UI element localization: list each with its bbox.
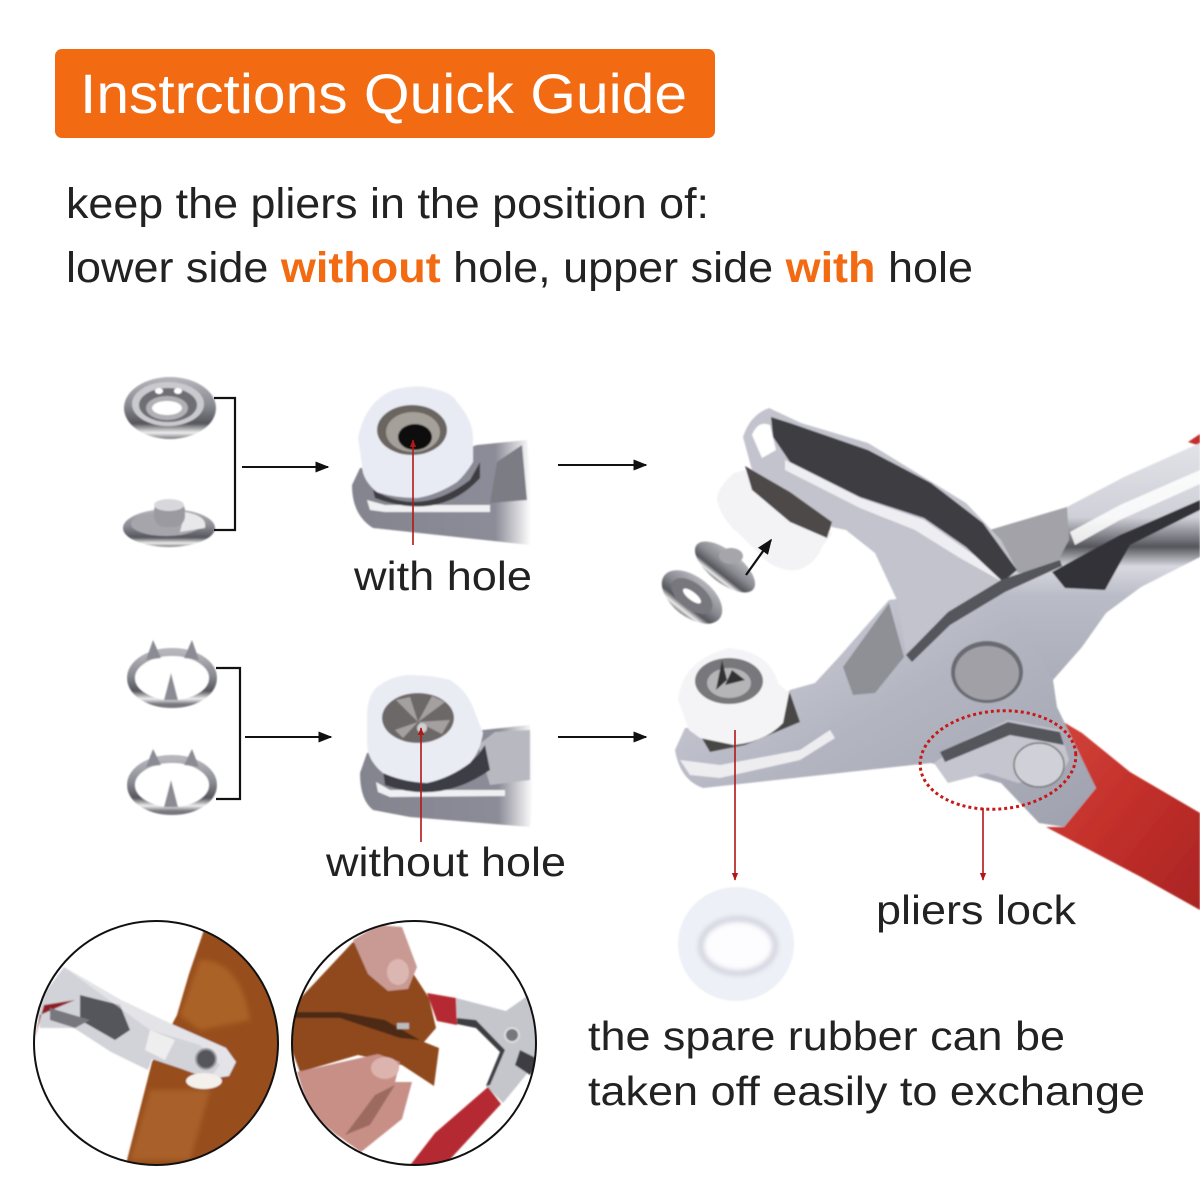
lower red handle: [1046, 720, 1200, 910]
red grip lower: [408, 1087, 501, 1168]
with hole die: [352, 386, 531, 545]
upper arm: [930, 443, 1200, 690]
red arrow: lock to label: [982, 808, 984, 880]
upper red tip: [1188, 434, 1200, 446]
thumb top: [353, 925, 417, 991]
lower die collar: [700, 693, 800, 752]
title banner: Instrctions Quick Guide: [80, 62, 687, 125]
arm dark streaks: [1052, 500, 1200, 590]
label: with hole: with hole: [353, 553, 532, 599]
pliers lock: [934, 720, 1069, 783]
metal head: [456, 994, 540, 1103]
black arrow to upper die: [746, 540, 771, 575]
snap: [397, 1023, 409, 1029]
spare rubber text: taken off easily to exchange: [588, 1068, 1145, 1114]
snap parts near arrow: [687, 532, 763, 602]
photo circle: pressing pliers on fabric: [290, 920, 540, 1168]
lower hand: [297, 1054, 412, 1152]
dark blade: [771, 417, 1017, 582]
lower white die: [678, 648, 789, 745]
instruction text: [66, 180, 973, 292]
bright jaw highlight: [752, 424, 776, 458]
lower jaw and body: [675, 585, 1096, 827]
pliers: [652, 408, 1200, 910]
arm window: [990, 507, 1069, 573]
red dotted circle: lock: [916, 704, 1080, 816]
label: pliers lock: pliers lock: [876, 887, 1077, 933]
instruction text: lower side without hole, upper side with hole: [66, 244, 973, 292]
title banner: [55, 49, 715, 138]
label: without hole: without hole: [325, 839, 566, 885]
arrow: with hole die to pliers: [558, 464, 646, 466]
pivot rivet: [951, 641, 1023, 703]
snap cap parts with bracket: [123, 377, 235, 547]
arrow: without hole die to pliers: [558, 736, 646, 738]
photo circle: fastening fabric: [30, 920, 285, 1170]
instruction text: keep the pliers in the position of:: [66, 180, 709, 228]
spare rubber text: [588, 1013, 1145, 1114]
without hole die: [360, 675, 533, 842]
prong ring parts with bracket: [131, 640, 240, 811]
red arrow: die to spare rubber: [734, 730, 736, 880]
leather: [290, 942, 439, 1086]
upper jaw: [743, 408, 1017, 653]
window between jaws: [843, 603, 904, 695]
arrow: bottom parts to without hole die: [245, 736, 331, 738]
upper white die: [717, 470, 832, 570]
red grip top: [427, 993, 457, 1025]
spare rubber text: the spare rubber can be: [588, 1013, 1065, 1059]
spare rubber ring: [678, 887, 794, 1001]
arrow: top parts to with hole die: [242, 466, 328, 468]
